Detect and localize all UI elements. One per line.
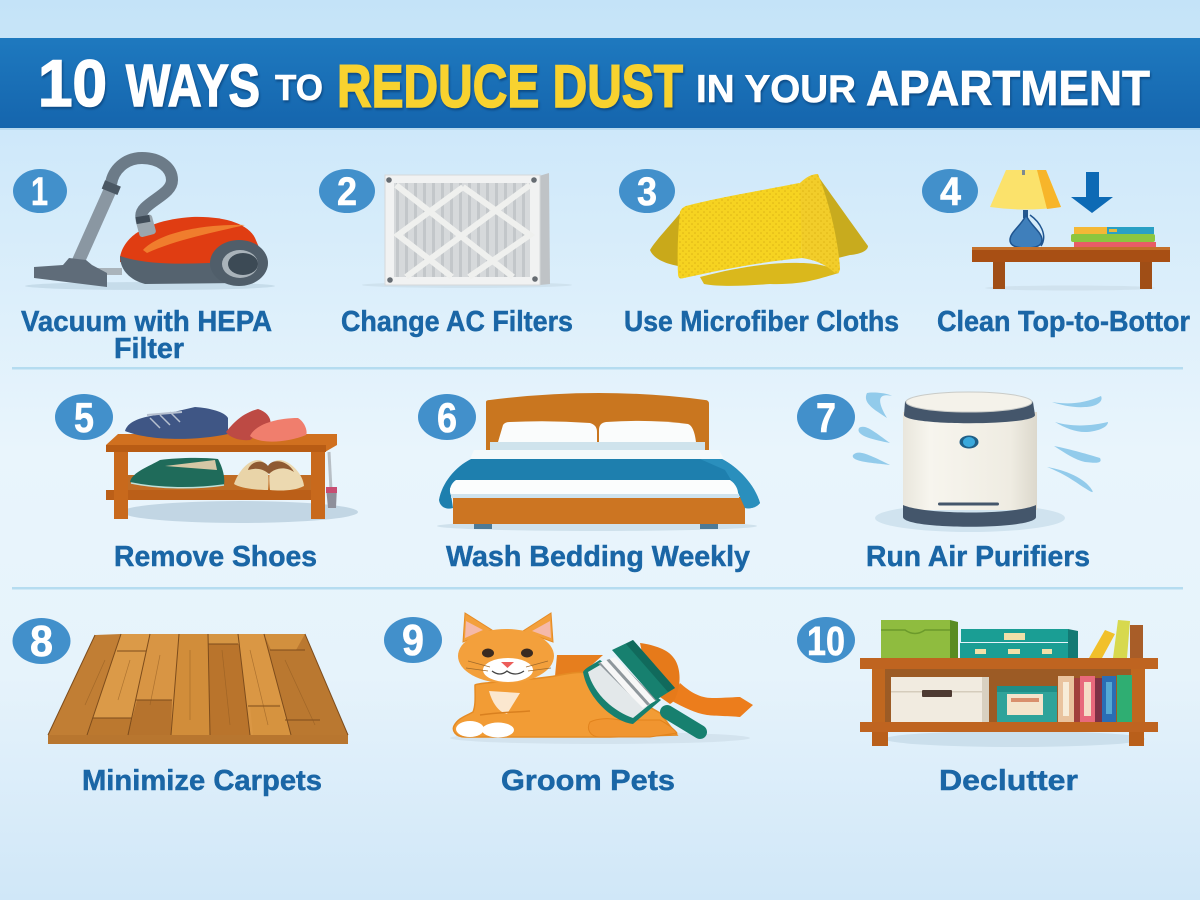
label: Use Microfiber Cloths <box>624 306 899 338</box>
badge 6: 6 <box>437 394 457 441</box>
label: Minimize Carpets <box>82 765 322 797</box>
title text: APARTMENT <box>866 62 1150 116</box>
label: Groom Pets <box>501 765 675 797</box>
item 7: purifier <box>797 392 1108 573</box>
badge 10: 10 <box>807 618 845 664</box>
label: Change AC Filters <box>341 306 573 338</box>
icon: vacuum cleaner <box>25 158 275 290</box>
badge 8: 8 <box>30 617 53 666</box>
badge 1 <box>13 169 67 214</box>
badge 7 <box>797 394 855 441</box>
label: Remove Shoes <box>114 541 317 573</box>
item 10: declutter <box>797 617 1158 797</box>
badge 3: 3 <box>637 170 657 214</box>
item 3: cloth <box>619 169 899 338</box>
title text: 10 <box>38 46 107 120</box>
title text: TO <box>275 67 323 108</box>
boxes on top <box>881 620 950 658</box>
item 5: shoes <box>55 394 358 573</box>
item 4: top to bottom <box>922 169 1190 338</box>
label: Filter <box>114 333 184 365</box>
item 8: floor <box>12 617 348 797</box>
lower items <box>891 677 988 722</box>
badge 4 <box>922 169 978 214</box>
badge 2 <box>319 169 375 214</box>
badge 8 <box>12 617 70 666</box>
badge 5 <box>55 394 113 441</box>
item 6: bed <box>418 393 760 573</box>
label: Wash Bedding Weekly <box>446 541 750 573</box>
icon: storage shelf <box>860 620 1158 747</box>
badge 9 <box>384 616 442 665</box>
airflow lines <box>853 392 1108 492</box>
icon: bed <box>437 393 760 531</box>
item 9: cat <box>384 613 753 797</box>
badge 5: 5 <box>74 394 94 441</box>
label: Declutter <box>939 765 1078 797</box>
icon: shoe rack <box>106 407 358 523</box>
badge 9: 9 <box>402 616 424 665</box>
title text <box>38 46 1150 120</box>
title text: WAYS <box>126 53 260 119</box>
plank seams <box>48 634 348 735</box>
badge 2: 2 <box>337 170 357 214</box>
label: Vacuum with HEPA <box>21 306 272 338</box>
label: Run Air Purifiers <box>866 541 1090 573</box>
icon: air purifier <box>853 392 1108 532</box>
icon: down arrow <box>1071 172 1113 213</box>
item 2: filter <box>319 169 573 338</box>
icon: hardwood floor <box>48 634 348 744</box>
title text: REDUCE DUST <box>337 53 683 120</box>
icon: lamp on shelf with books <box>972 170 1170 290</box>
badge 1: 1 <box>31 170 48 214</box>
icon: microfiber cloth <box>650 174 868 286</box>
icon: cat with brush <box>450 613 753 744</box>
badge 4: 4 <box>940 170 962 214</box>
item 1: vacuum <box>13 158 275 365</box>
title banner <box>0 38 1200 130</box>
badge 7: 7 <box>816 394 836 441</box>
label <box>21 306 272 365</box>
brush <box>667 712 700 732</box>
badge 3 <box>619 169 675 214</box>
icon: AC filter <box>362 173 572 288</box>
title text: IN YOUR <box>696 68 856 111</box>
badge 6 <box>418 394 476 441</box>
